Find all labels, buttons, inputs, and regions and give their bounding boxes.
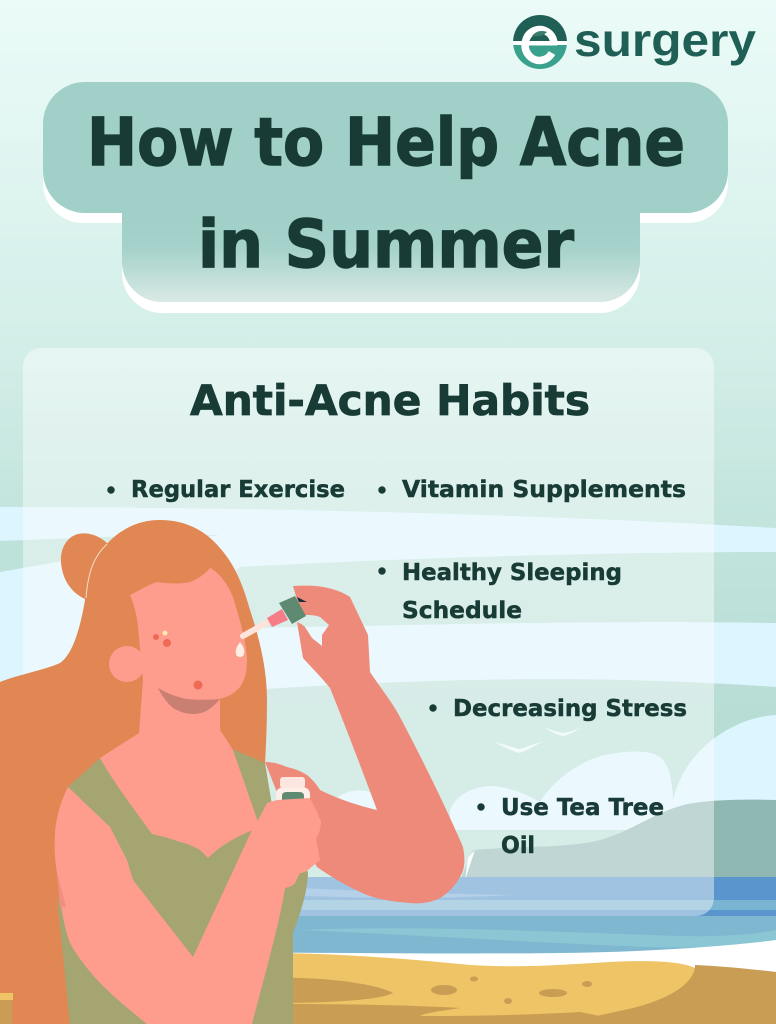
icon: logo mark bbox=[513, 15, 567, 69]
acne spots bbox=[153, 630, 202, 690]
arm underside sliver bbox=[57, 873, 66, 907]
list item: Healthy Sleeping Schedule bbox=[378, 560, 622, 624]
list item: Use Tea Tree Oil: Oil bbox=[501, 833, 535, 859]
back arm and hand bbox=[265, 586, 464, 903]
list item: Healthy Sleeping Schedule: Schedule bbox=[402, 598, 522, 624]
front arm and hand bbox=[55, 787, 321, 1024]
panel: translucent habits card bbox=[23, 348, 714, 916]
title line 2: in Summer bbox=[198, 206, 574, 283]
list item: Decreasing Stress: Decreasing Stress bbox=[453, 696, 687, 722]
dress bbox=[58, 750, 308, 1024]
hair bbox=[0, 520, 267, 1024]
title line 1: How to Help Acne bbox=[87, 104, 685, 181]
neck and chest bbox=[100, 680, 258, 858]
list item: Use Tea Tree Oil bbox=[478, 795, 664, 859]
icon: seagulls bbox=[495, 727, 582, 753]
supplement bottle bbox=[276, 777, 310, 802]
chin shadow bbox=[158, 688, 220, 714]
ear bbox=[109, 646, 145, 682]
hair highlight bbox=[86, 544, 107, 598]
list item: Healthy Sleeping Schedule: Healthy Sleeping bbox=[402, 560, 622, 586]
dropper bbox=[243, 596, 307, 636]
list item: Vitamin Supplements: Vitamin Supplements bbox=[402, 477, 686, 503]
illustration: woman applying serum bbox=[0, 520, 464, 1024]
sand strip by hair bbox=[0, 993, 13, 1024]
list item: Use Tea Tree Oil: Use Tea Tree bbox=[501, 795, 664, 821]
heading: Anti-Acne Habits: Anti-Acne Habits bbox=[190, 376, 590, 425]
face bbox=[130, 568, 247, 700]
serum drop bbox=[236, 642, 244, 657]
logo: esurgery bbox=[513, 14, 756, 69]
logo wordmark: surgery bbox=[574, 14, 756, 66]
list item: Regular Exercise: Regular Exercise bbox=[131, 477, 345, 503]
title banner bbox=[43, 82, 728, 313]
